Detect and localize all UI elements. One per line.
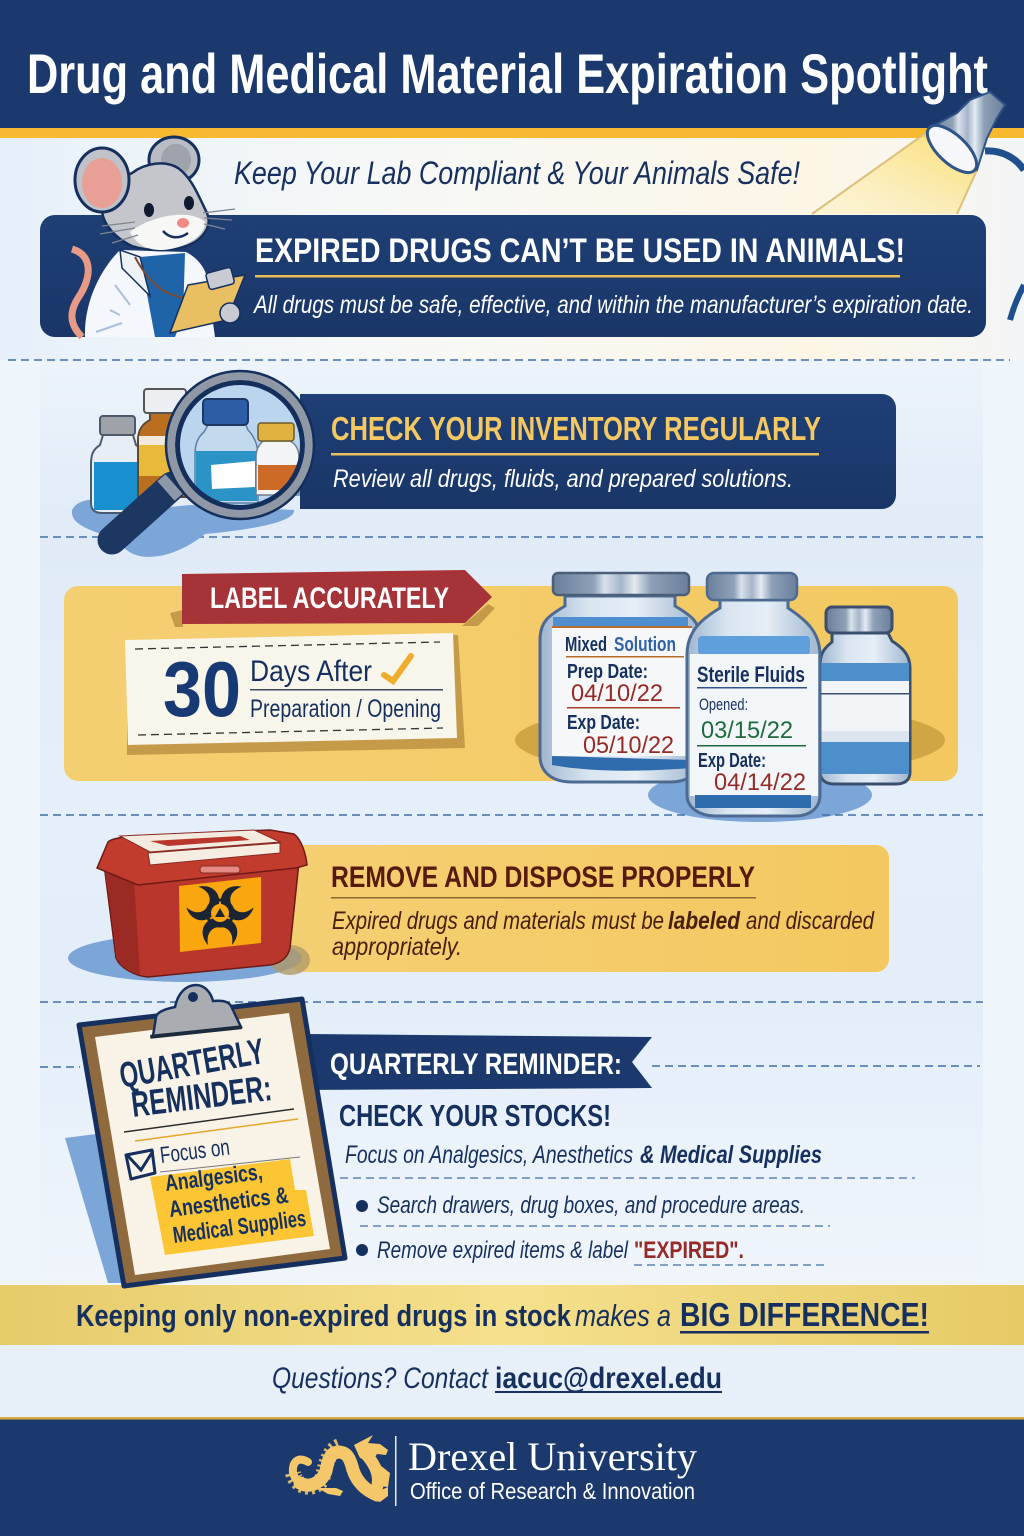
sticky highlight note: Anesthetics & <box>167 1182 290 1222</box>
clipboard heading <box>116 1030 274 1125</box>
icon: Drexel dragon <box>293 1435 390 1502</box>
label text: sterile fluids: Sterile Fluids <box>697 662 805 687</box>
label text: mixed solution: 05/10/22 <box>583 732 674 759</box>
ribbon: quarterly reminder: QUARTERLY REMINDER: <box>330 1048 622 1081</box>
label text: mixed solution: Exp Date: <box>567 712 640 734</box>
card: 30 days after preparation: 30 <box>163 645 241 733</box>
contact line: Questions? Contact <box>272 1362 489 1395</box>
card: 30 days after preparation: Preparation / Opening <box>250 695 441 723</box>
label text: mixed solution: Prep Date: <box>567 661 648 683</box>
icon: red biohazard sharps bin <box>68 830 310 982</box>
label text: mixed solution: Solution <box>614 634 676 656</box>
dispose heading: REMOVE AND DISPOSE PROPERLY <box>331 861 755 894</box>
footer divider <box>395 1436 396 1506</box>
icon: vials under magnifying glass <box>72 371 314 557</box>
panel: check your inventory <box>300 394 896 509</box>
central content panel background <box>40 360 983 1285</box>
footer band <box>0 1417 1024 1536</box>
card: 30 days after preparation <box>125 633 465 755</box>
ribbon: quarterly reminder <box>305 1034 652 1090</box>
label text: sterile fluids: 03/15/22 <box>701 717 793 744</box>
dispose body text: labeled <box>668 907 741 935</box>
subtitle: Keep Your Lab Compliant & Your Animals Safe! <box>234 155 800 191</box>
label text: mixed solution <box>565 634 684 759</box>
panel: expired drugs banner <box>40 215 986 337</box>
inventory heading: CHECK YOUR INVENTORY REGULARLY <box>331 410 821 447</box>
contact band background <box>0 1345 1024 1418</box>
callout strip: big difference: makes a <box>575 1298 671 1333</box>
label text: mixed solution: 04/10/22 <box>571 680 663 707</box>
icon: spotlight lamp <box>812 92 1024 320</box>
icon: right vial <box>820 607 910 784</box>
focus line: & Medical Supplies <box>640 1141 822 1169</box>
checkbox <box>126 1150 155 1179</box>
bullet: remove expired items: "EXPIRED". <box>634 1237 744 1264</box>
sticky highlight note: Medical Supplies <box>171 1205 308 1248</box>
label text: mixed solution: Mixed <box>565 634 607 656</box>
icon: clipboard with quarterly reminder <box>65 985 345 1286</box>
bullet: remove expired items: Remove expired items & label <box>377 1237 629 1264</box>
ribbon: label accurately: LABEL ACCURATELY <box>210 582 449 615</box>
focus on label: Focus on <box>158 1134 231 1168</box>
dispose body text: Expired drugs and materials must be <box>332 907 664 935</box>
callout strip: big difference <box>0 1285 1024 1345</box>
label text: sterile fluids: Exp Date: <box>698 750 766 772</box>
banner heading: EXPIRED DRUGS CAN’T BE USED IN ANIMALS! <box>255 232 905 270</box>
focus line: Focus on Analgesics, Anesthetics <box>345 1141 633 1169</box>
clipboard clip <box>150 985 242 1039</box>
clipboard heading: REMINDER: <box>129 1067 274 1125</box>
icon: mouse in lab coat <box>72 137 245 337</box>
label text: sterile fluids: 04/14/22 <box>714 769 806 796</box>
shadows behind bottles <box>515 702 945 778</box>
dispose body text: and discarded <box>746 907 875 935</box>
bullet: search drawers: Search drawers, drug boxes, and procedure areas. <box>377 1192 805 1219</box>
label text: sterile fluids <box>697 662 807 796</box>
callout strip: big difference: Keeping only non-expired drugs in stock <box>76 1298 572 1333</box>
top background wash <box>0 138 1024 360</box>
footer office name: Office of Research & Innovation <box>410 1478 695 1504</box>
panel: remove and dispose <box>290 845 889 972</box>
contact line: iacuc@drexel.edu <box>495 1362 722 1395</box>
icon: sterile fluids jar <box>687 573 820 816</box>
panel: label accurately <box>64 570 958 822</box>
contact line <box>272 1362 722 1395</box>
sticky highlight note: Analgesics, <box>163 1158 264 1196</box>
callout strip: big difference: BIG DIFFERENCE! <box>680 1296 929 1333</box>
ribbon: label accurately <box>170 570 495 627</box>
heading: check your stocks: CHECK YOUR STOCKS! <box>339 1098 611 1133</box>
dispose body text <box>332 907 875 961</box>
label text: sterile fluids: Opened: <box>699 695 748 714</box>
inventory subtext: Review all drugs, fluids, and prepared solutions. <box>333 465 793 493</box>
sticky highlight note <box>150 1158 314 1255</box>
card: 30 days after preparation: Days After <box>250 655 372 688</box>
header band <box>0 0 1024 138</box>
footer university name: Drexel University <box>408 1434 697 1479</box>
icon: mixed solution jar <box>540 573 700 782</box>
dispose body text: appropriately. <box>332 933 462 961</box>
clipboard heading: QUARTERLY <box>116 1030 267 1096</box>
biohazard symbol <box>184 882 256 945</box>
